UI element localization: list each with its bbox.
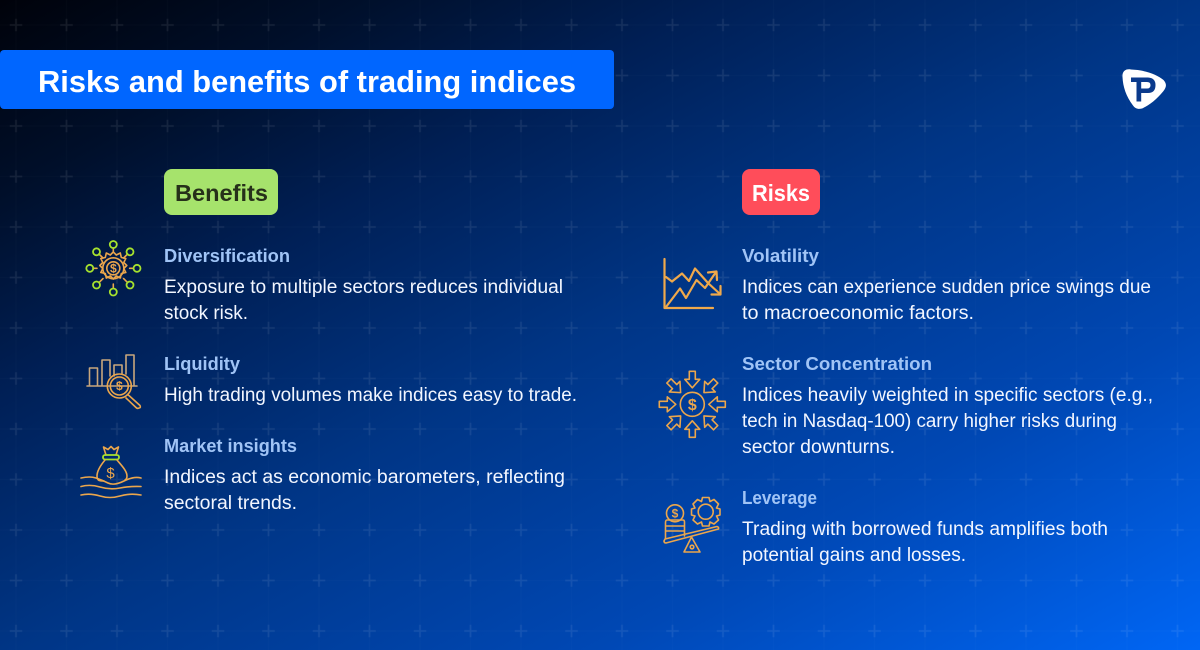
icon: diversification network	[86, 241, 140, 296]
Sector Concentration text: Sector Concentration	[742, 353, 932, 374]
Liquidity text: High trading volumes make indices easy to trade.	[164, 385, 577, 406]
benefits badge	[164, 169, 278, 215]
Diversification text: stock risk.	[164, 303, 248, 324]
Market insights text: Market insights	[164, 435, 297, 456]
Volatility text	[742, 245, 1151, 324]
Leverage text: Leverage	[742, 487, 817, 508]
panel: risks	[659, 169, 1153, 566]
Diversification text	[164, 245, 563, 324]
Market insights text: sectoral trends.	[164, 493, 297, 514]
icon: liquidity chart with magnifier: $	[116, 379, 123, 393]
icon: leverage seesaw	[664, 498, 720, 552]
title banner	[0, 50, 614, 109]
icon: leverage seesaw: $	[672, 506, 679, 520]
Market insights text: Indices act as economic barometers, reflecting	[164, 467, 565, 488]
icon: sector concentration arrows: $	[688, 397, 697, 414]
icon: volatility chart	[664, 259, 720, 308]
Leverage text: potential gains and losses.	[742, 545, 966, 566]
icon: brand logo	[1122, 69, 1166, 109]
icon: diversification network: $	[110, 262, 117, 276]
benefits badge: Benefits	[175, 180, 268, 206]
panel: benefits	[81, 169, 577, 514]
Sector Concentration text: sector downturns.	[742, 437, 895, 458]
Sector Concentration text: Indices heavily weighted in specific sectors (e.g.,	[742, 385, 1153, 406]
icon: money bag on waves: $	[106, 465, 115, 482]
icon: liquidity chart with magnifier	[87, 355, 140, 408]
Diversification text: Exposure to multiple sectors reduces individual	[164, 277, 563, 298]
Leverage text: Trading with borrowed funds amplifies both	[742, 519, 1108, 540]
Volatility text: to macroeconomic factors.	[742, 303, 974, 324]
Liquidity text: Liquidity	[164, 353, 241, 374]
Sector Concentration text: tech in Nasdaq-100) carry higher risks during	[742, 411, 1117, 432]
Liquidity text	[164, 353, 577, 406]
Market insights text	[164, 435, 565, 514]
risks badge: Risks	[752, 180, 810, 206]
risks badge	[742, 169, 820, 215]
Leverage text	[742, 487, 1108, 566]
icon: sector concentration arrows	[659, 371, 725, 437]
Volatility text: Indices can experience sudden price swings due	[742, 277, 1151, 298]
Diversification text: Diversification	[164, 245, 290, 266]
icon: money bag on waves	[81, 446, 141, 498]
title banner: Risks and benefits of trading indices	[38, 64, 576, 99]
Volatility text: Volatility	[742, 245, 820, 266]
Sector Concentration text	[742, 353, 1153, 458]
